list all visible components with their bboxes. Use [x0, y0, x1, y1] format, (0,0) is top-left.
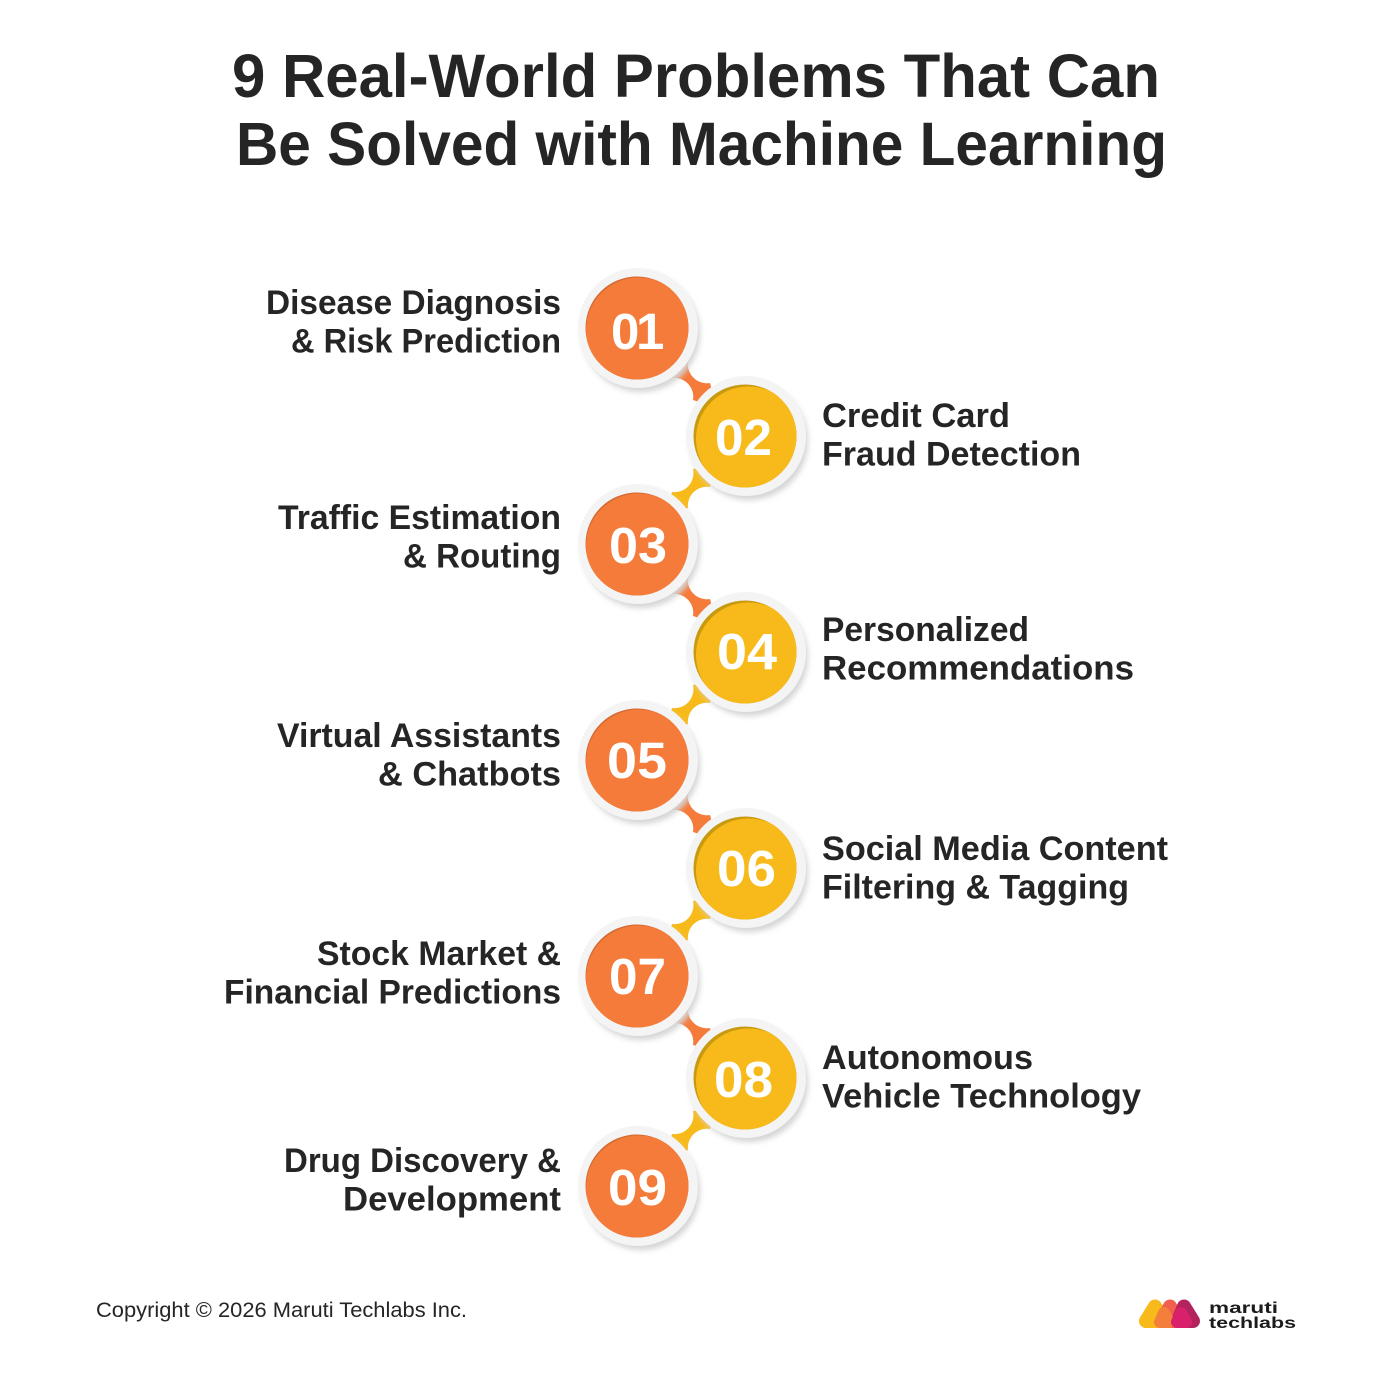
step 05 circle [578, 700, 700, 824]
step 02 number: 02 [715, 409, 772, 466]
step 03 number: 03 [609, 517, 667, 574]
step 01 label: & Risk Prediction [291, 322, 561, 360]
step 01 label: Disease Diagnosis [266, 284, 561, 322]
step 07 number: 07 [609, 948, 666, 1005]
step 06 label: Social Media Content [822, 830, 1168, 868]
title [232, 42, 1167, 178]
step 06 label [822, 830, 1168, 906]
step 03 label: & Routing [403, 538, 561, 576]
title: 9 Real-World Problems That Can [232, 42, 1160, 110]
step 07 label: Stock Market & [317, 935, 561, 973]
step 09 label: Development [343, 1180, 561, 1218]
step 09 label: Drug Discovery & [284, 1142, 561, 1180]
step 03 circle [578, 484, 700, 608]
step 09 circle [578, 1126, 700, 1250]
icon: logo mark [1146, 1306, 1193, 1322]
step 03 label: Traffic Estimation [278, 499, 561, 537]
step 01 circle [578, 268, 700, 392]
logo [1146, 1300, 1296, 1332]
step 05 label: & Chatbots [378, 756, 561, 794]
step 05 label: Virtual Assistants [277, 717, 561, 755]
step 02 label: Fraud Detection [822, 436, 1081, 474]
logo wordmark [1209, 1300, 1296, 1332]
step 04 label [822, 611, 1134, 688]
step 07 label [224, 935, 561, 1012]
step 08 label: Autonomous [822, 1039, 1033, 1077]
step 09 label [284, 1142, 561, 1218]
copyright text: Copyright © 2026 Maruti Techlabs Inc. [96, 1299, 467, 1322]
step 08 number: 08 [714, 1051, 773, 1108]
logo wordmark: maruti [1209, 1300, 1278, 1317]
step 04 label: Personalized [822, 611, 1029, 649]
step 01 number: 01 [611, 303, 664, 360]
logo wordmark: techlabs [1209, 1315, 1296, 1332]
step 08 label [822, 1039, 1141, 1116]
step 04 number: 04 [717, 623, 778, 680]
step 02 label [822, 397, 1081, 474]
step 09 number: 09 [608, 1159, 667, 1216]
step 05 label [277, 717, 561, 794]
step 07 label: Financial Predictions [224, 974, 561, 1012]
step 05 number: 05 [607, 732, 667, 789]
step 08 label: Vehicle Technology [822, 1078, 1141, 1116]
step 06 number: 06 [717, 840, 776, 897]
step 04 label: Recommendations [822, 650, 1134, 688]
step 02 label: Credit Card [822, 397, 1010, 435]
step 01 label [266, 284, 561, 360]
step 07 circle [578, 916, 700, 1040]
step 06 label: Filtering & Tagging [822, 868, 1129, 906]
step 08 circle [686, 1018, 808, 1142]
step 03 label [278, 499, 561, 576]
step 04 circle [686, 592, 808, 716]
step 02 circle [686, 376, 808, 500]
title: Be Solved with Machine Learning [236, 110, 1167, 178]
step 06 circle [686, 808, 808, 932]
connectors between numbered circles [665, 358, 717, 1158]
